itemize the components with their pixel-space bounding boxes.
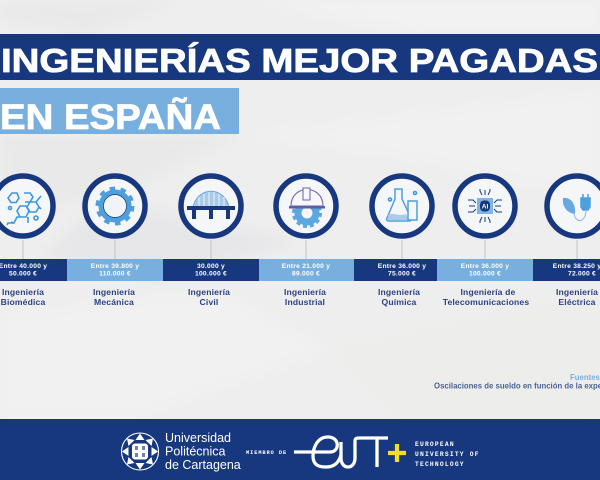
EUT name: UNIVERSITY OF bbox=[415, 451, 480, 458]
salary text: 50.000 € bbox=[9, 270, 37, 278]
icon: gear bbox=[85, 176, 145, 236]
university emblem bbox=[122, 433, 158, 470]
salary text: 100.000 € bbox=[469, 270, 501, 278]
salary text: 100.000 € bbox=[195, 270, 227, 278]
icon: flasks bbox=[372, 176, 432, 236]
icon: molecule bbox=[0, 176, 53, 236]
salary text: Entre 36.000 y bbox=[378, 263, 426, 270]
university name: Politécnica bbox=[165, 444, 225, 458]
name: Industrial bbox=[285, 297, 325, 307]
item: Química bbox=[372, 176, 432, 307]
university name: Universidad bbox=[165, 431, 231, 445]
name: Mecánica bbox=[94, 297, 134, 307]
university name: de Cartagena bbox=[165, 458, 241, 472]
salary text: Entre 40.000 y bbox=[0, 263, 47, 270]
item: Mecánica bbox=[85, 176, 145, 307]
salary strip bbox=[0, 259, 600, 281]
name: Ingeniería bbox=[2, 287, 44, 297]
name: Ingeniería de bbox=[461, 287, 516, 297]
title band: INGENIERÍAS MEJOR PAGADAS bbox=[1, 42, 598, 79]
subtitle band: EN ESPAÑA bbox=[0, 98, 221, 137]
item: Civil bbox=[181, 176, 241, 307]
icon: helmet and gear bbox=[276, 176, 336, 236]
name: Civil bbox=[200, 297, 218, 307]
connector lines bbox=[23, 240, 577, 259]
subtitle band bbox=[0, 88, 239, 137]
EUT name: EUROPEAN bbox=[415, 441, 455, 448]
name: Química bbox=[382, 297, 417, 307]
name: Ingeniería bbox=[188, 287, 230, 297]
name: Ingeniería bbox=[284, 287, 326, 297]
icon: AI chip: AI bbox=[482, 204, 488, 210]
salary text: 89.000 € bbox=[292, 270, 320, 278]
member label: MIEMBRO DE bbox=[246, 450, 287, 456]
salary text: 110.000 € bbox=[99, 270, 131, 278]
salary text: Entre 38.250 y bbox=[553, 263, 600, 270]
footer band bbox=[0, 419, 600, 480]
EUT name: TECHNOLOGY bbox=[415, 461, 465, 468]
name: Ingeniería bbox=[93, 287, 135, 297]
salary text: 75.000 € bbox=[388, 270, 416, 278]
item: Industrial bbox=[276, 176, 336, 307]
yellow plus bbox=[388, 444, 406, 462]
icon: leaf and plug bbox=[547, 176, 600, 236]
name: Telecomunicaciones bbox=[443, 297, 529, 307]
name: Biomédica bbox=[1, 297, 45, 307]
title band bbox=[0, 34, 600, 80]
name: Ingeniería bbox=[556, 287, 598, 297]
salary text: 72.000 € bbox=[568, 270, 596, 278]
source note bbox=[434, 373, 600, 390]
item: Eléctrica bbox=[547, 176, 600, 307]
salary text: 30.000 y bbox=[197, 263, 225, 270]
salary text: Entre 39.800 y bbox=[91, 263, 139, 270]
salary text: Entre 36.000 y bbox=[461, 263, 509, 270]
EUT logo bbox=[294, 437, 388, 467]
item: Biomédica bbox=[0, 176, 53, 307]
salary text: Entre 21.000 y bbox=[282, 263, 330, 270]
name: Ingeniería bbox=[378, 287, 420, 297]
name: Eléctrica bbox=[558, 297, 596, 307]
source note: Fuentes bbox=[570, 373, 600, 382]
icon: bridge bbox=[181, 176, 241, 236]
item: Telecomunicaciones bbox=[443, 176, 529, 307]
